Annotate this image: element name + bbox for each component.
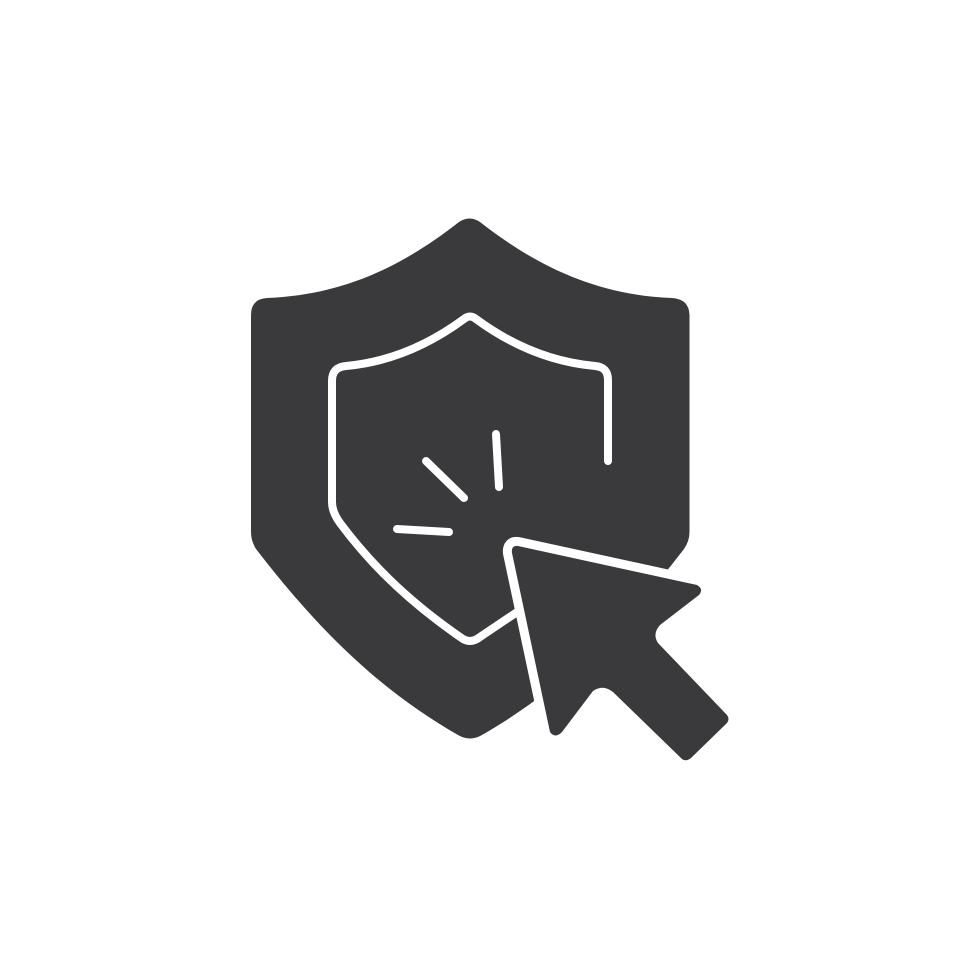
inner shield outline — [332, 316, 608, 641]
click spark lines — [397, 434, 499, 532]
cursor arrow — [512, 546, 728, 760]
shield body — [251, 218, 690, 738]
